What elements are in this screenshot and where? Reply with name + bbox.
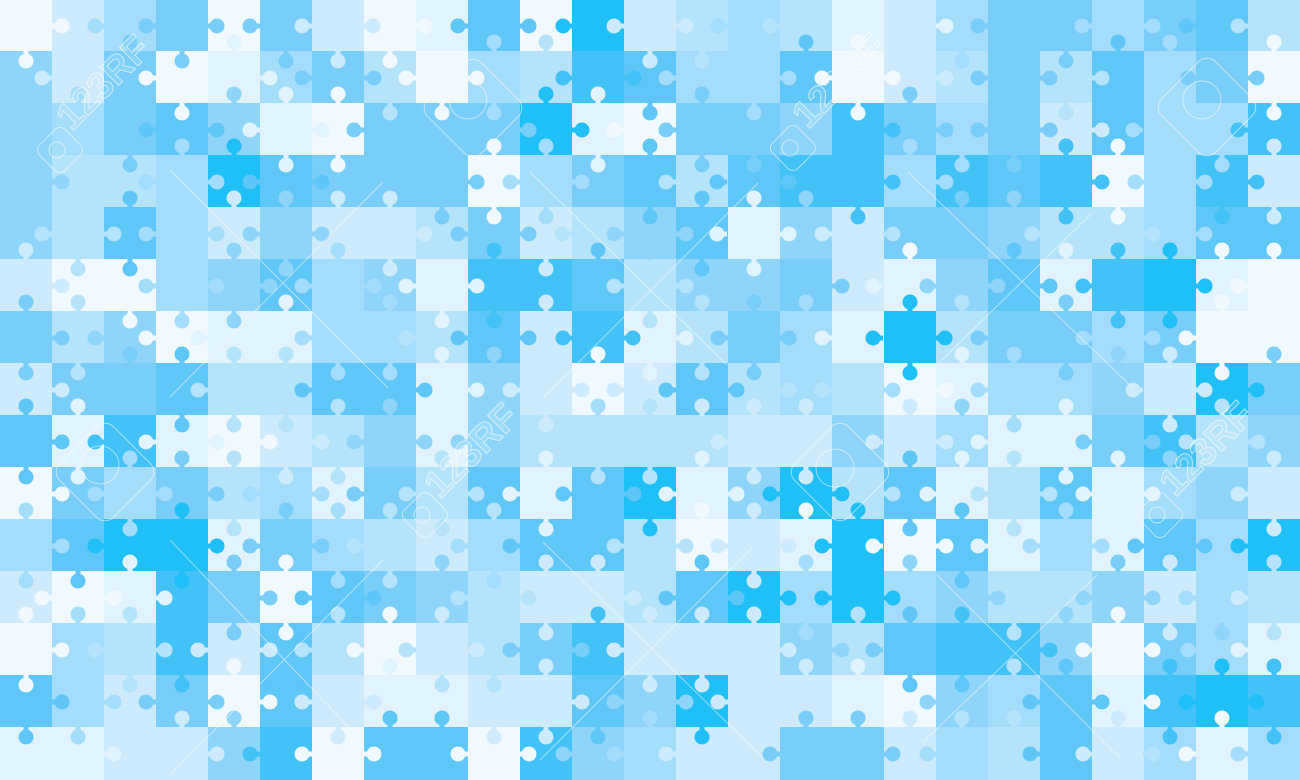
puzzle row 15 [0,727,1300,780]
puzzle row 9 [0,415,1300,467]
watermark: stamp middle centre [786,418,894,526]
watermark: stamp top right [1153,53,1261,161]
puzzle row 11 [0,519,1300,571]
watermark: 123RF middle centre [400,396,527,540]
watermark: stamp middle left [51,418,159,526]
puzzle row 3 [0,103,1300,155]
puzzle row 2 [0,51,1300,103]
puzzle row 12 [0,571,1248,623]
puzzle row 7 [0,311,1300,363]
watermark: 123RF middle right [1135,394,1262,540]
watermark: 123RF top left [35,28,159,175]
watermark: 123RF middle right: 123RF [1152,394,1262,504]
watermark: stamp top centre [419,54,527,162]
watermark: 123RF middle centre: 123RF [417,396,527,506]
puzzle row 10 [0,467,1300,519]
puzzle row 6 [0,259,1300,311]
watermark: 123RF top centre [768,26,895,173]
puzzle row 4 [0,155,1300,207]
puzzle row 14 [0,675,1300,727]
puzzle row 5 [0,207,1300,259]
diagonal watermark lines [170,170,1133,775]
puzzle row 1 [0,0,1248,51]
watermark: 123RF top centre: 123RF [785,26,895,136]
puzzle row 8 [0,363,1300,415]
watermark: 123RF top left: 123RF [49,28,159,138]
puzzle row 13 [0,623,1300,675]
